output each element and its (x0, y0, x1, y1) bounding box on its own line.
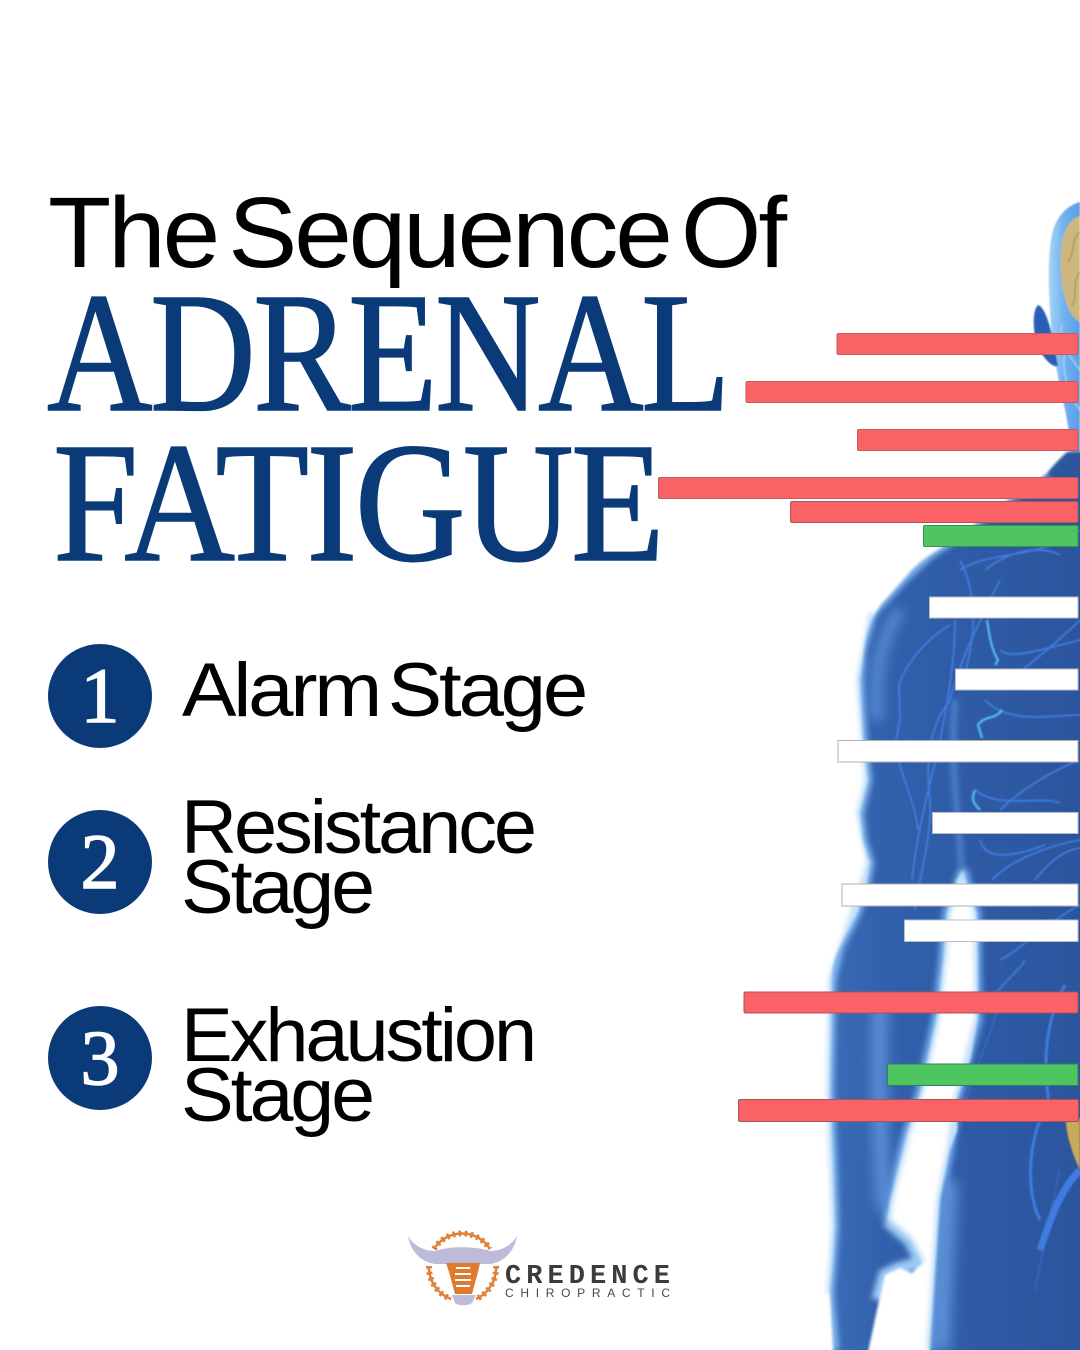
body highlights and nerves (830, 473, 1080, 1350)
white bar 3 (838, 740, 1078, 762)
title line: FATIGUE: FATIGUE (53, 408, 662, 597)
stage 3: 3 (80, 1014, 120, 1101)
label: exhaustion stage: Stage (181, 1053, 372, 1138)
body outer glow (830, 613, 978, 1350)
title line: The Sequence Of: The Sequence Of (48, 177, 787, 289)
label: exhaustion stage: Exhaustion (181, 993, 534, 1078)
torso and arm (828, 450, 1080, 1350)
green bar 1 (924, 526, 1078, 546)
red bar 7 (738, 1100, 1078, 1122)
icon: number badge 2 (48, 810, 152, 914)
logo text: chiropractic: CHIROPRACTIC (505, 1286, 670, 1300)
pelvis organ (1066, 1118, 1080, 1170)
icon: gear ring (429, 1233, 496, 1299)
title (47, 177, 787, 597)
stage 1: 1 (80, 652, 120, 739)
stage 3 (48, 993, 534, 1138)
logo text: credence: CREDENCE (505, 1262, 670, 1292)
label: alarm stage: Alarm Stage (182, 648, 585, 733)
bars (658, 334, 1078, 1122)
label: resistance stage: Resistance (181, 785, 534, 870)
icon: number badge 3 (48, 1006, 152, 1110)
white bar 6 (904, 920, 1078, 942)
label: resistance stage: Stage (181, 845, 372, 930)
red bar 5 (790, 502, 1078, 522)
icon: brain (1061, 216, 1080, 322)
icon: ear (1034, 305, 1058, 366)
red bar 1 (837, 334, 1078, 354)
white bar 5 (842, 884, 1078, 906)
icon: number badge 1 (48, 644, 152, 748)
green bar 2 (888, 1064, 1078, 1086)
icon: bull horns (408, 1236, 517, 1264)
icon: spine on face (446, 1263, 480, 1294)
stage 2: 2 (80, 818, 120, 905)
white bar 2 (956, 669, 1078, 690)
red bar 2 (746, 382, 1078, 402)
stage 2 (48, 785, 534, 930)
anatomical body figure (800, 202, 1080, 1350)
white bar 4 (932, 812, 1078, 834)
red bar 3 (858, 430, 1078, 450)
red bar 6 (744, 992, 1078, 1013)
icon: bull nose (452, 1295, 476, 1305)
logo (408, 1233, 670, 1305)
red bar 4 (658, 478, 1078, 498)
white bar 1 (930, 597, 1078, 618)
stage 1 (48, 644, 585, 748)
head and neck (1034, 202, 1080, 452)
title line: ADRENAL: ADRENAL (47, 258, 728, 447)
